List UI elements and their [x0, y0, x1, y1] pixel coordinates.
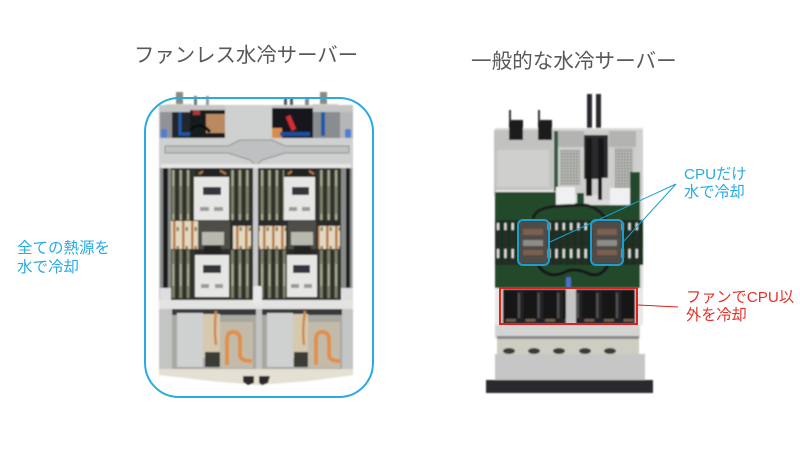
rear center panel: [225, 105, 272, 138]
risers: [553, 130, 643, 195]
rear right bay: [272, 108, 353, 139]
CPU heat spreaders: [518, 221, 622, 264]
title: fanless water-cooled server: ファンレス水冷サーバー: [134, 44, 358, 67]
memory zone background: [160, 168, 352, 302]
green motherboard: [495, 172, 643, 288]
label: all heat sources water cooled: 全ての熱源を: [17, 239, 110, 257]
label: all heat sources water cooled: 水で冷却: [17, 258, 79, 276]
power supply block: [494, 110, 553, 197]
label: fans cool everything except CPU: 外を冷却: [686, 307, 747, 324]
coolant manifold band: [171, 221, 340, 249]
memory modules: [171, 170, 340, 298]
hose bundle: [584, 135, 610, 200]
CPU cold plates: [194, 168, 317, 297]
water hoses: [587, 94, 601, 138]
title: typical water-cooled server: 一般的な水冷サーバー: [471, 50, 677, 73]
rear connectors: [166, 92, 338, 113]
rear left bay: [160, 110, 225, 139]
cyan outline: all heat sources water cooled: [145, 98, 373, 397]
bottom air shroud: [159, 369, 353, 385]
front bezel: [486, 380, 653, 393]
label: fans cool everything except CPU: ファンでCPU以: [686, 289, 794, 306]
photo: fanless water-cooled server: [159, 92, 353, 385]
metal crossbar: [159, 138, 353, 169]
label: CPU only water cooled: 水で冷却: [684, 184, 745, 201]
drive bays and lid: [495, 325, 645, 380]
lower rail: [159, 286, 353, 309]
cyan CPU highlights and leader lines: [518, 184, 676, 265]
lower bays: [160, 309, 352, 373]
chassis: [495, 128, 643, 323]
photo: typical water-cooled server: [486, 94, 653, 393]
chassis: [159, 105, 353, 373]
label: CPU only water cooled: CPUだけ: [684, 166, 746, 183]
red fan highlight and leader line: [500, 288, 678, 324]
fan row: [495, 288, 643, 325]
